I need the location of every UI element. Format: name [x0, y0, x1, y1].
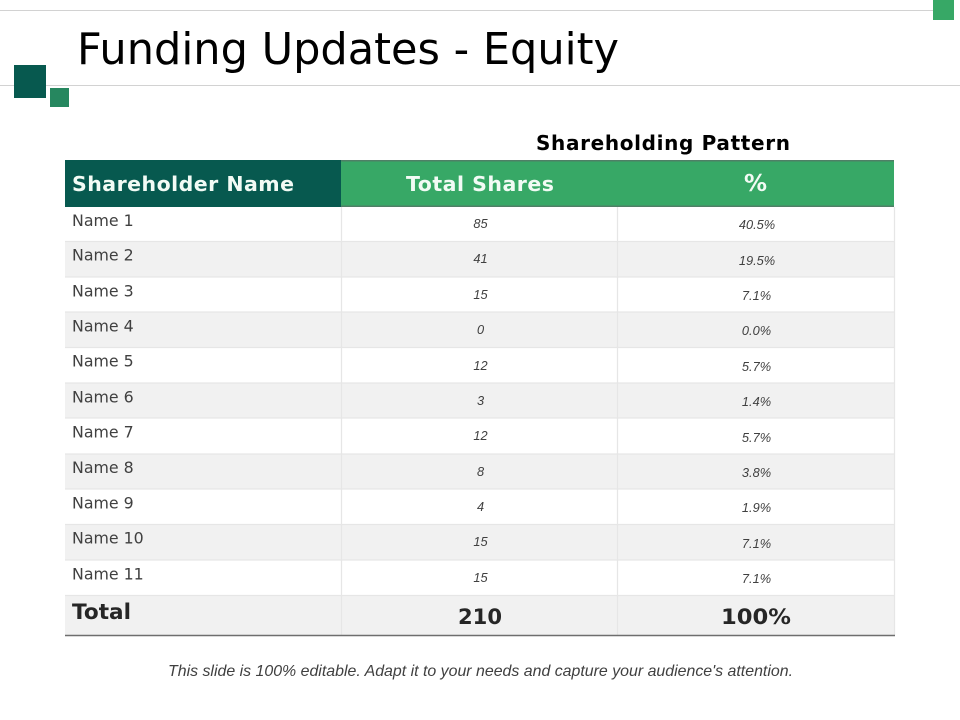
row: Total: 100%: [721, 605, 791, 630]
row: Name 5: Name 5: [72, 352, 134, 370]
row: Name 1: [72, 211, 775, 232]
row: Name 7: 12: [473, 428, 488, 443]
row: Name 10: Name 10: [72, 528, 144, 548]
row: Name 10: 15: [473, 534, 488, 549]
row: Name 6: Name 6: [72, 388, 134, 406]
row: Name 9: [72, 494, 771, 515]
row: Name 4: 0: [477, 322, 485, 337]
row: Name 4: [72, 316, 771, 338]
table subtitle: Shareholding Pattern: [536, 131, 790, 155]
row: Name 8: 8: [477, 464, 485, 479]
table: shareholding pattern: [65, 160, 895, 636]
row: Total: Total: [72, 600, 131, 625]
row: Name 4: Name 4: [72, 316, 134, 336]
row: Name 6: 3: [477, 393, 484, 408]
header row: [65, 160, 894, 207]
row: Name 7: Name 7: [72, 422, 134, 442]
row: Total: [72, 600, 791, 630]
title: Funding Updates - Equity: [77, 24, 619, 75]
row: Name 11: [72, 564, 771, 586]
row: Name 9: 4: [477, 499, 484, 514]
row: Name 5: [72, 352, 771, 374]
row: Name 2: 41: [473, 251, 488, 266]
row: Name 4: 0.0%: [742, 323, 771, 338]
row: Name 1: 40.5%: [739, 217, 775, 232]
row: Name 8: [72, 458, 771, 480]
row: Name 5: 5.7%: [742, 359, 771, 374]
row: Name 9: Name 9: [72, 494, 134, 512]
row: Name 1: Name 1: [72, 211, 134, 230]
row: Name 6: [72, 388, 771, 409]
row stripes: [65, 242, 895, 635]
row: Name 7: 5.7%: [742, 430, 771, 445]
footnote: This slide is 100% editable. Adapt it to your needs and capture your audience's attention.: [168, 663, 793, 680]
row: Name 11: 7.1%: [742, 571, 771, 586]
header row: %: [744, 171, 767, 197]
row: Name 8: Name 8: [72, 458, 134, 477]
row: Name 9: 1.9%: [742, 500, 771, 515]
row: Name 1: 85: [473, 216, 488, 231]
row: Name 10: [72, 528, 771, 551]
row: Name 2: Name 2: [72, 246, 134, 264]
row: Name 2: 19.5%: [739, 253, 775, 268]
row: Name 11: Name 11: [72, 564, 144, 584]
row: Name 11: 15: [473, 570, 488, 585]
row: Name 10: 7.1%: [742, 536, 771, 551]
row: Name 3: Name 3: [72, 282, 134, 300]
row: Name 3: 15: [473, 287, 488, 302]
row: Name 5: 12: [473, 358, 488, 373]
row: Name 6: 1.4%: [742, 394, 771, 409]
row: Name 2: [72, 246, 775, 268]
row: Name 8: 3.8%: [742, 465, 771, 480]
icon: small green square: [50, 88, 69, 107]
row: Total: 210: [458, 605, 502, 630]
header row: Shareholder Name: [72, 172, 294, 196]
icon: large teal square: [14, 65, 46, 98]
header row: Total Shares: [406, 172, 554, 196]
row: Name 7: [72, 422, 771, 445]
row: Name 3: 7.1%: [742, 288, 771, 303]
row: Name 3: [72, 282, 771, 303]
icon: top right square: [933, 0, 954, 20]
